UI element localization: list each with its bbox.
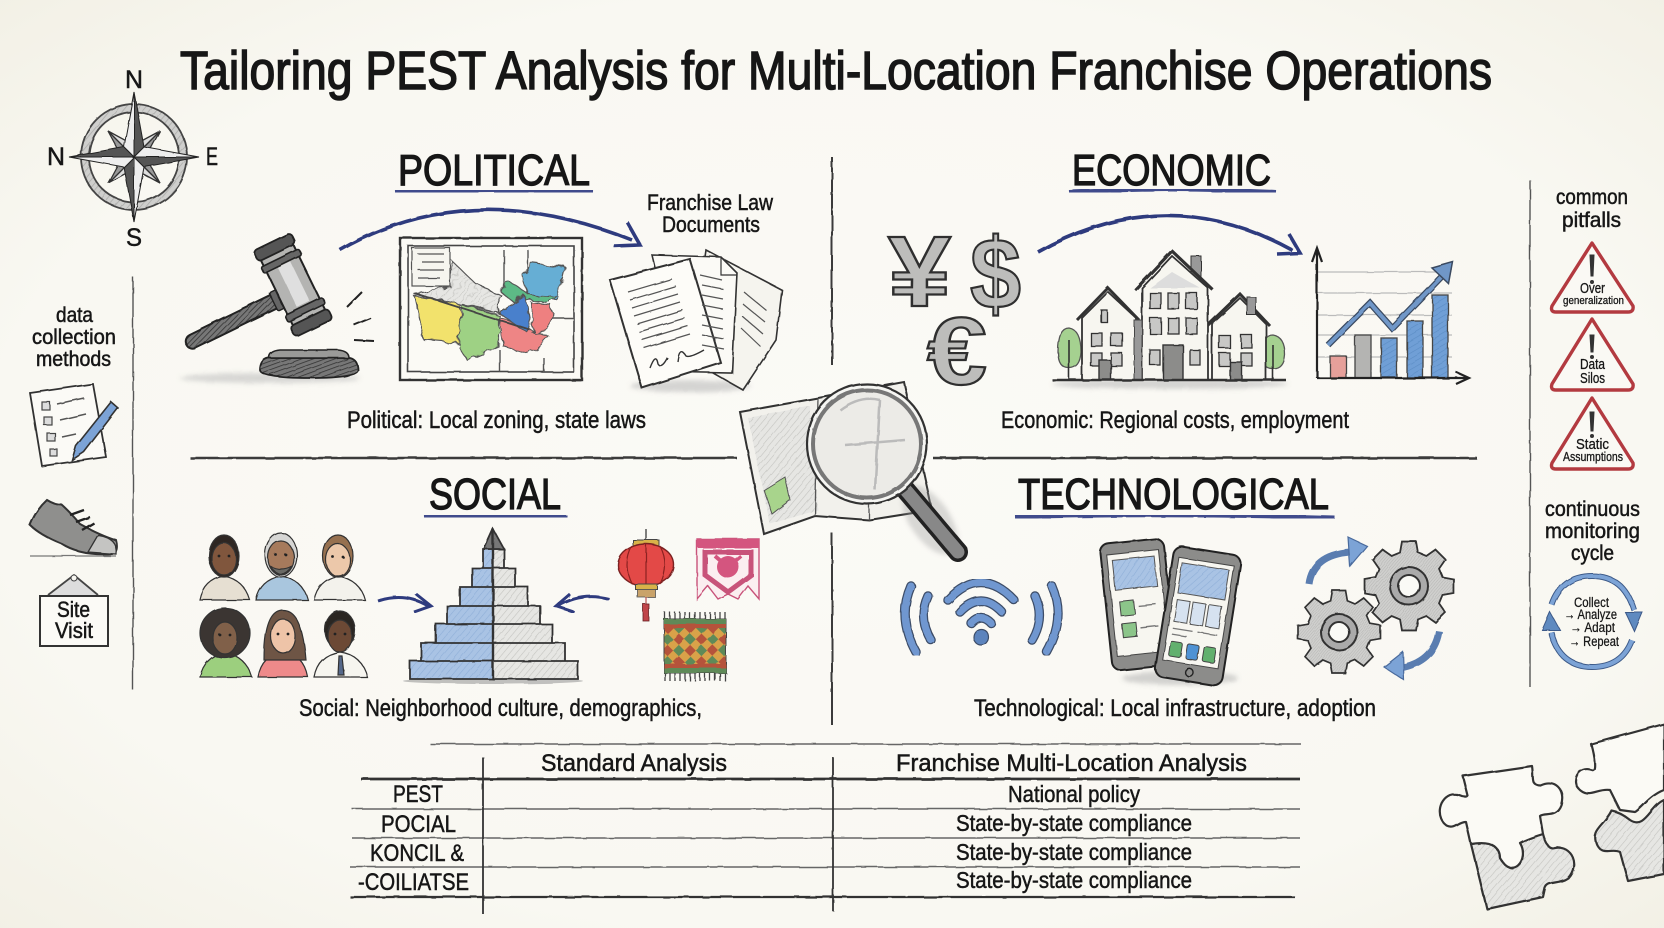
heading: economic: ECONOMIC	[1072, 146, 1271, 195]
icon: wifi signal	[905, 582, 1058, 652]
icon: currency symbols	[888, 216, 1021, 405]
row labels: KONCIL &	[370, 840, 464, 867]
icon: warning static assumptions: Assumptions	[1563, 449, 1623, 464]
icon: warning over generalization: Over	[1580, 280, 1605, 297]
icon: franchise buildings	[1052, 251, 1288, 389]
icon: zoning map	[400, 238, 582, 380]
description: social: Social: Neighborhood culture, demographics,	[299, 695, 702, 722]
sidebar: data collection methods	[30, 304, 118, 646]
description: technological: Technological: Local infrastructure, adoption	[974, 695, 1376, 722]
icon: franchise law documents	[610, 250, 782, 392]
icon: currency symbols: ¥	[888, 216, 951, 328]
icon: monitoring cycle: → Adapt	[1570, 620, 1615, 635]
icon: smartphones	[1100, 538, 1242, 687]
heading underline	[395, 190, 593, 192]
icon: map under magnifying glass	[740, 382, 969, 564]
icon: warning data silos: Silos	[1580, 370, 1605, 387]
icon: currency symbols: $	[970, 218, 1021, 330]
icon: warning static assumptions: Static	[1576, 436, 1609, 453]
label: franchise law documents	[647, 190, 773, 237]
icon: gears with arrows	[1298, 537, 1453, 680]
sidebar heading: methods	[36, 348, 111, 371]
icon: red lantern	[618, 529, 674, 621]
chart: demographic pyramid	[403, 529, 583, 684]
table header: standard analysis: Standard Analysis	[541, 750, 727, 777]
franchise column values: State-by-state compliance	[956, 810, 1192, 836]
icon: warning over generalization	[1552, 243, 1633, 312]
arrow: people to pyramid	[378, 594, 431, 612]
table header: franchise multi-location analysis: Franchise Multi-Location Analysis	[896, 750, 1247, 777]
icon: monitoring cycle: → Repeat	[1569, 634, 1619, 649]
chart: rising bars	[1312, 248, 1469, 384]
heading underline	[1069, 190, 1276, 192]
franchise column values: National policy	[1008, 781, 1140, 807]
icon: compass: E	[206, 143, 218, 171]
icon: gavel	[162, 233, 374, 383]
heading underline	[1015, 515, 1335, 518]
icon: site visit sign	[40, 575, 108, 646]
sidebar heading: continuous monitoring cycle: monitoring	[1545, 520, 1640, 543]
row labels: POCIAL	[381, 811, 456, 838]
icon: monitoring cycle: → Analyze	[1564, 607, 1617, 622]
icon: puzzle pieces	[1440, 724, 1664, 909]
icon: compass	[47, 66, 218, 252]
row labels: PEST	[393, 781, 443, 808]
title: Tailoring PEST Analysis for Multi-Location Franchise Operations	[180, 41, 1492, 101]
icon: warning data silos: Data	[1580, 356, 1606, 373]
row labels: -COILIATSE	[358, 869, 469, 896]
comparison table	[350, 744, 1301, 914]
icon: compass: S	[126, 224, 142, 252]
icon: warning data silos	[1552, 319, 1633, 390]
label: franchise law documents: Franchise Law	[647, 190, 773, 215]
icon: site visit sign: Visit	[55, 618, 93, 643]
panel: technological	[905, 470, 1453, 722]
panel: social	[200, 470, 759, 722]
franchise column values	[956, 781, 1192, 893]
icon: monitoring cycle	[1542, 576, 1642, 667]
panel: political	[162, 146, 782, 434]
franchise column values: State-by-state compliance	[956, 839, 1192, 865]
icon: warning static assumptions	[1552, 398, 1633, 469]
sidebar heading: collection	[32, 326, 116, 349]
icon: compass: N	[125, 66, 143, 94]
icon: patterned textile	[697, 539, 759, 599]
sidebar: common pitfalls	[1542, 186, 1642, 667]
sidebar heading: common	[1556, 186, 1628, 209]
icon: clipboard checklist	[30, 384, 118, 466]
icon: monitoring cycle: Collect	[1574, 595, 1609, 610]
franchise column values: State-by-state compliance	[956, 867, 1192, 893]
sidebar heading: pitfalls	[1562, 209, 1621, 232]
heading: political: POLITICAL	[398, 146, 590, 195]
description: political: Political: Local zoning, state laws	[347, 407, 646, 434]
panel: economic	[888, 146, 1469, 434]
sidebar heading: data	[56, 304, 93, 327]
heading: technological: TECHNOLOGICAL	[1018, 470, 1329, 519]
icon: six diverse people	[200, 533, 367, 677]
sidebar heading	[32, 304, 116, 371]
description: economic: Economic: Regional costs, employment	[1001, 407, 1349, 434]
icon: site visit sign: Site	[57, 597, 90, 622]
icon: currency symbols: €	[927, 298, 987, 405]
heading underline	[424, 516, 567, 517]
icon: walking shoe	[30, 500, 117, 556]
sidebar heading: continuous monitoring cycle	[1545, 498, 1640, 565]
arrow: gavel to documents	[340, 210, 640, 250]
icon: compass: N	[47, 143, 65, 171]
heading: social: SOCIAL	[429, 470, 561, 519]
arrow: culture to pyramid	[556, 594, 609, 612]
row labels	[358, 781, 469, 896]
sidebar heading	[1556, 186, 1628, 232]
sidebar heading: continuous monitoring cycle: cycle	[1571, 542, 1614, 565]
label: franchise law documents: Documents	[662, 212, 760, 237]
icon: warning over generalization: generalization	[1563, 295, 1624, 307]
sidebar heading: continuous monitoring cycle: continuous	[1545, 498, 1640, 521]
icon: woven rug	[664, 612, 726, 681]
arrow: currency to chart	[1038, 215, 1300, 254]
